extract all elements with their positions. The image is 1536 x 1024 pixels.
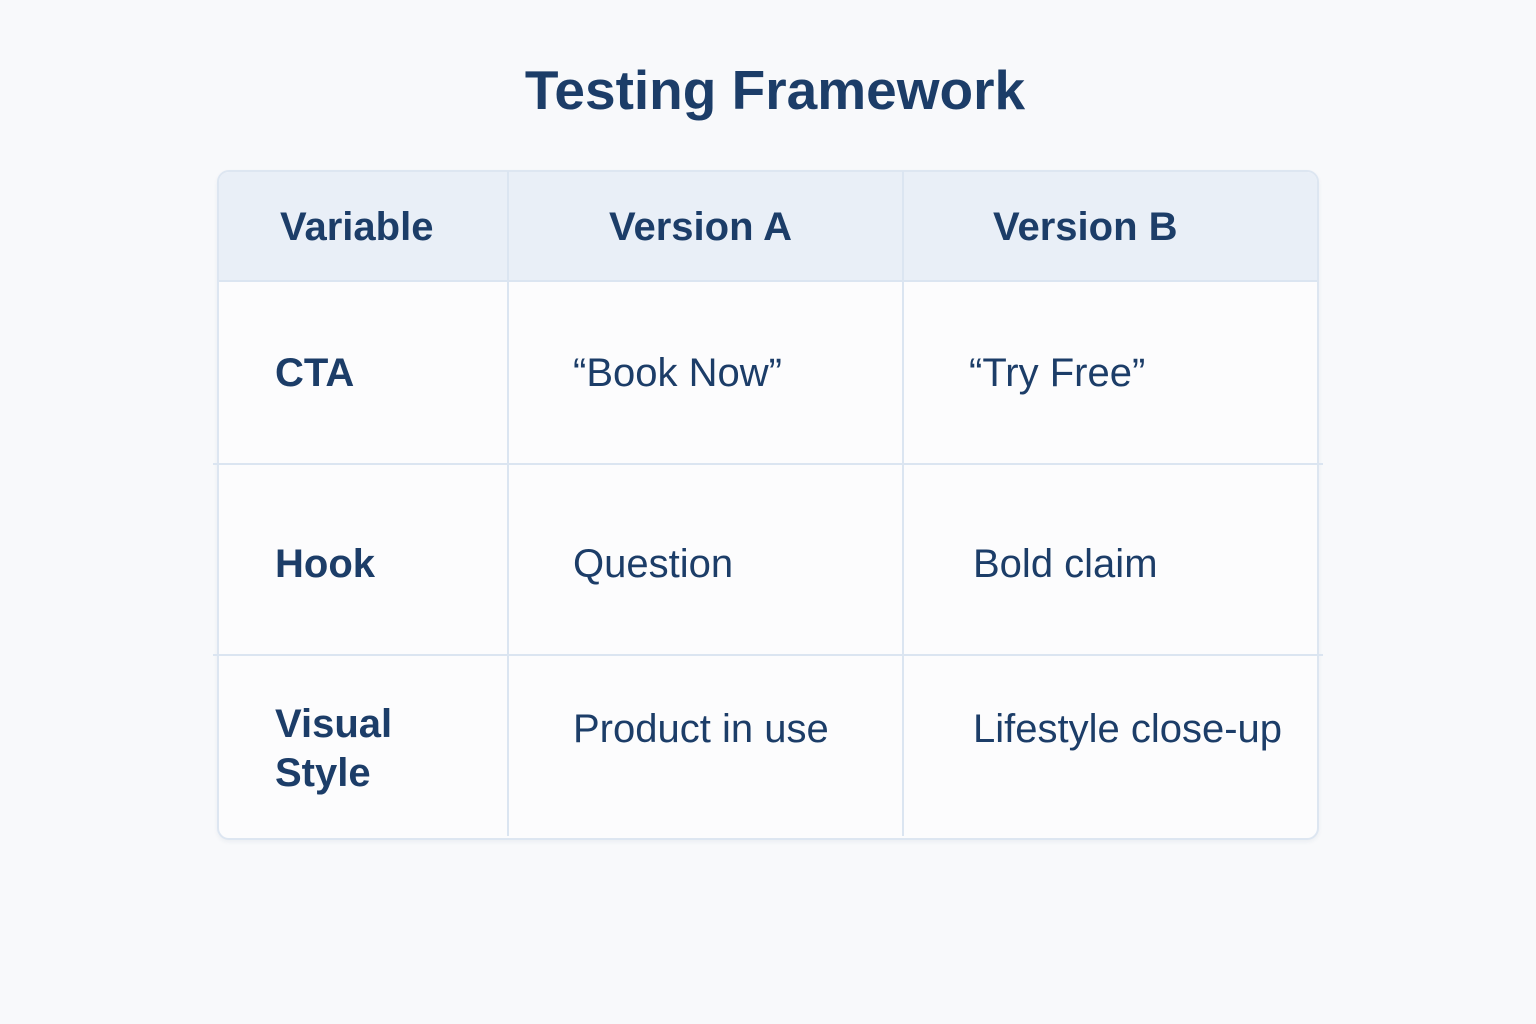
cell: Question: Question	[573, 542, 733, 586]
row: Hook: Hook	[275, 542, 375, 586]
header: Variable: Variable	[280, 205, 433, 249]
title: Testing Framework	[525, 59, 1025, 121]
row: CTA: CTA	[275, 351, 354, 395]
cell: Product in use: Product in use	[573, 707, 829, 751]
header: Version B: Version B	[993, 205, 1178, 249]
header: Version A: Version A	[609, 205, 792, 249]
cell: Try Free: “Try Free”	[969, 351, 1145, 395]
cell: Book Now: “Book Now”	[573, 351, 782, 395]
row: Visual Style: Visual Style	[275, 702, 392, 795]
cell: Lifestyle close-up: Lifestyle close-up	[973, 707, 1282, 751]
table	[217, 170, 1319, 840]
cell: Bold claim: Bold claim	[973, 542, 1158, 586]
table header	[219, 172, 1317, 282]
